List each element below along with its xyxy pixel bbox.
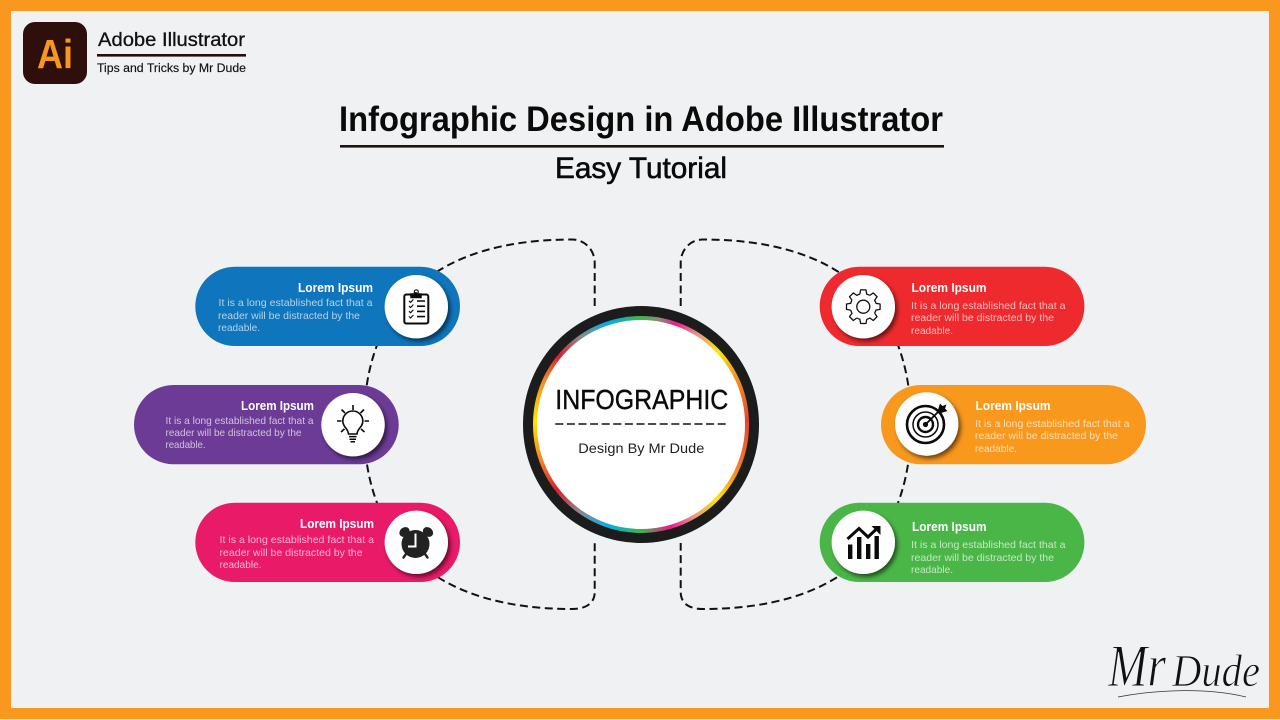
right dashed connector	[681, 240, 911, 609]
text block: blue pill: It is a long established fact that a	[218, 297, 373, 309]
title: Infographic Design in Adobe Illustrator	[339, 100, 943, 139]
text block: red pill	[911, 281, 1066, 337]
icon: clipboard	[404, 290, 428, 324]
icon: bar chart with rising arrow	[848, 526, 880, 559]
logo: Adobe Illustrator icon: Ai	[37, 31, 73, 77]
text block: green pill: readable.	[911, 564, 953, 576]
panel: pink pill	[195, 503, 460, 582]
text block: red pill: readable.	[911, 325, 953, 337]
logo: Adobe Illustrator icon	[23, 22, 87, 84]
left dashed connector	[364, 240, 595, 609]
text block: orange pill: readable.	[975, 443, 1017, 455]
signature: Mr	[1107, 633, 1167, 699]
center emblem	[523, 306, 759, 543]
text block: orange pill: Lorem Ipsum	[976, 399, 1050, 413]
text block: purple pill: It is a long established fact that a	[166, 415, 314, 427]
text block: green pill	[911, 520, 1066, 576]
icon: alarm clock	[397, 525, 435, 558]
text block: green pill: It is a long established fact that a	[911, 539, 1066, 551]
center heading: INFOGRAPHIC	[555, 384, 728, 415]
text block: blue pill: reader will be distracted by the	[218, 310, 360, 322]
panel: orange pill	[881, 385, 1146, 464]
brand name heading: Adobe Illustrator	[98, 30, 246, 51]
text block: purple pill: Lorem Ipsum	[241, 399, 314, 413]
text block: orange pill: It is a long established fact that a	[975, 418, 1130, 430]
signature	[1107, 633, 1260, 699]
text block: blue pill	[218, 281, 373, 334]
text block: purple pill	[166, 399, 314, 451]
icon: light bulb	[337, 405, 369, 442]
text block: red pill: It is a long established fact that a	[911, 300, 1066, 312]
text block: purple pill: readable.	[166, 439, 206, 451]
text block: blue pill: Lorem Ipsum	[298, 281, 373, 295]
text block: pink pill: readable.	[220, 559, 262, 571]
center caption: Design By Mr Dude	[578, 440, 704, 456]
text block: red pill: Lorem Ipsum	[912, 281, 986, 295]
panel: red pill	[820, 267, 1084, 346]
text block: orange pill: reader will be distracted by the	[975, 430, 1118, 442]
icon: target with arrow	[907, 404, 948, 443]
text block: pink pill: reader will be distracted by the	[220, 547, 363, 559]
icon: gear	[846, 290, 880, 324]
text block: pink pill	[220, 517, 374, 571]
text block: red pill: reader will be distracted by the	[911, 312, 1054, 324]
subtitle: Easy Tutorial	[555, 152, 727, 185]
signature: Dude	[1171, 645, 1260, 696]
panel: green pill	[820, 503, 1084, 582]
text block: pink pill: Lorem Ipsum	[300, 517, 374, 531]
text block: green pill: reader will be distracted by the	[911, 552, 1054, 564]
text block: green pill: Lorem Ipsum	[912, 520, 986, 534]
text block: blue pill: readable.	[218, 322, 260, 334]
panel: blue pill	[195, 267, 460, 346]
brand tagline: Tips and Tricks by Mr Dude	[97, 63, 246, 75]
text block: orange pill	[975, 399, 1130, 455]
panel: purple pill	[134, 385, 399, 464]
text block: purple pill: reader will be distracted by the	[166, 427, 302, 439]
text block: pink pill: It is a long established fact that a	[220, 534, 374, 546]
